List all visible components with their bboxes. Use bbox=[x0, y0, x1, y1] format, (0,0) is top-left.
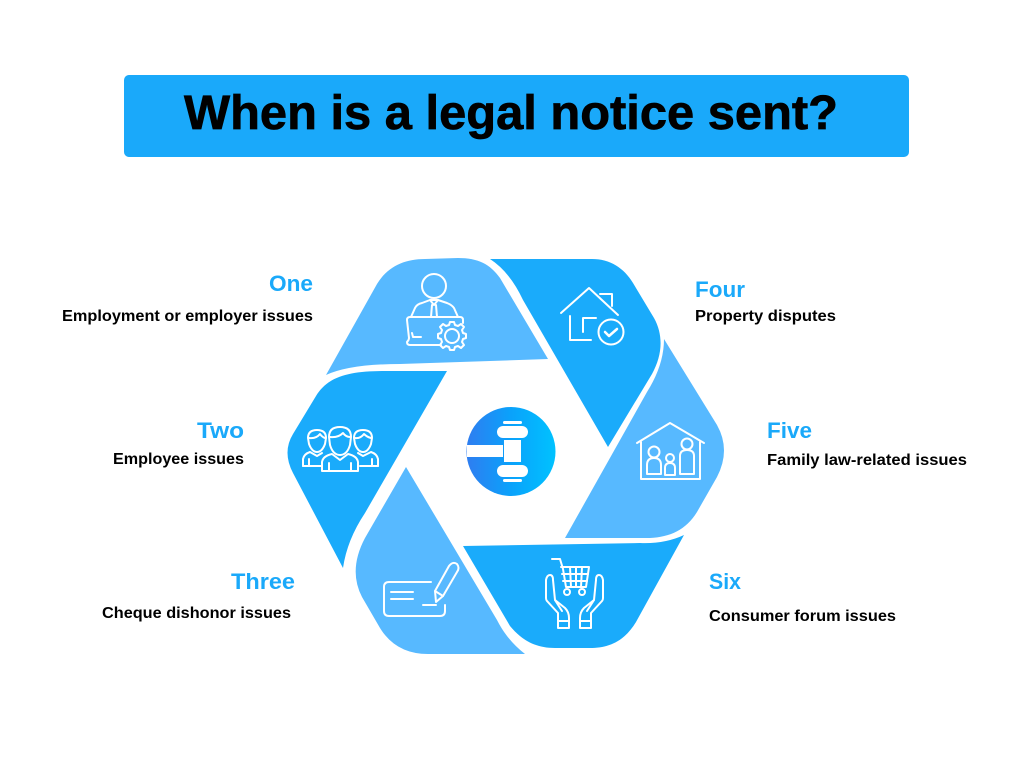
label: Four: Property disputes bbox=[695, 308, 836, 325]
label: Two bbox=[113, 418, 244, 468]
segment five bbox=[565, 339, 724, 538]
label: Five bbox=[767, 418, 967, 469]
segment six bbox=[463, 535, 684, 648]
label: Six bbox=[709, 569, 896, 625]
center gavel icon bbox=[466, 407, 556, 496]
label: Two: Employee issues bbox=[113, 451, 244, 468]
icon: employer with laptop and gear bbox=[407, 274, 466, 350]
label: Two: Two bbox=[197, 418, 244, 443]
segment one bbox=[326, 258, 548, 375]
title banner: When is a legal notice sent? bbox=[184, 87, 838, 140]
label: Five: Family law-related issues bbox=[767, 452, 967, 469]
segment four bbox=[490, 259, 661, 447]
icon: cheque and pen bbox=[384, 563, 458, 616]
label: Six: Six bbox=[709, 569, 742, 594]
icon: family in house bbox=[637, 423, 704, 479]
label: One bbox=[62, 271, 313, 325]
label: Three: Three bbox=[231, 569, 295, 594]
icon: cart held in hands bbox=[546, 559, 603, 628]
segment three bbox=[356, 467, 525, 654]
label: Six: Consumer forum issues bbox=[709, 608, 896, 625]
label: One: One bbox=[269, 271, 313, 296]
title banner bbox=[124, 75, 909, 157]
label: One: Employment or employer issues bbox=[62, 308, 313, 325]
label: Three bbox=[102, 569, 295, 622]
icon: employees bbox=[303, 427, 378, 471]
label: Four: Four bbox=[695, 277, 745, 302]
label: Five: Five bbox=[767, 418, 812, 443]
icon: property with check mark bbox=[561, 288, 624, 344]
label: Three: Cheque dishonor issues bbox=[102, 605, 291, 622]
label: Four bbox=[695, 277, 836, 325]
segment two bbox=[288, 371, 447, 568]
